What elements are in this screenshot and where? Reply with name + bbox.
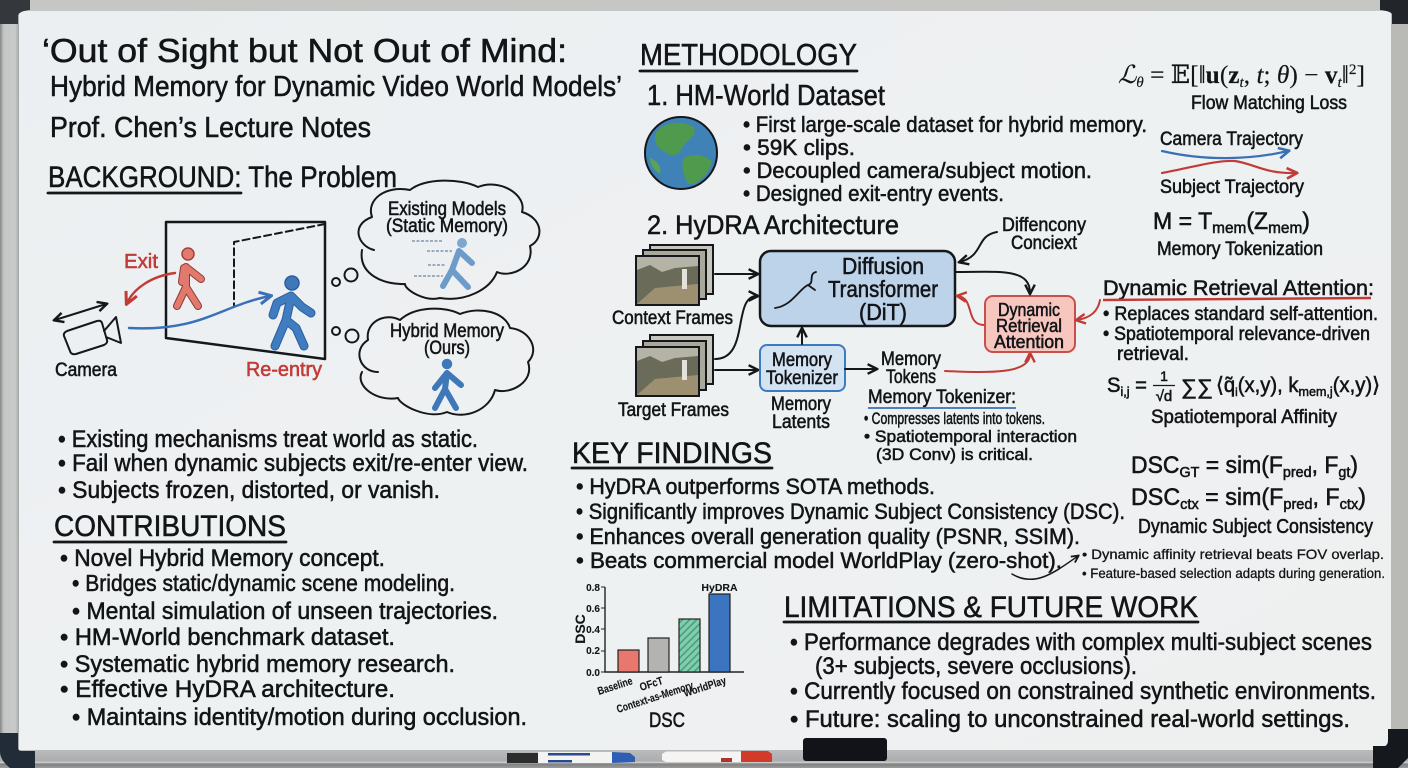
icon: consistent subject	[435, 360, 461, 408]
arrow: worldplay note	[1012, 556, 1078, 579]
arrow: re-entry path	[129, 296, 270, 328]
equation: spatiotemporal affinity: S	[1107, 374, 1121, 397]
chart axis: 0.6	[586, 604, 600, 615]
equation: dynamic subject consistency: )	[1358, 484, 1366, 511]
bar chart: DSC	[572, 582, 744, 732]
arrow: context to DiT	[960, 232, 997, 262]
heading: key findings: KEY FINDINGS	[572, 437, 772, 470]
limitations bullets: • Currently focused on constrained synthetic environments.	[790, 678, 1376, 705]
equation: spatiotemporal affinity: (x,y), k	[1238, 374, 1299, 397]
diagram: camera and subject trajectories: Camera Trajectory	[1160, 129, 1303, 150]
title: Prof. Chen’s Lecture Notes	[50, 112, 371, 144]
bar labels: Context-as-Memory	[615, 680, 696, 716]
box: dynamic retrieval attention: Attention	[994, 332, 1064, 352]
label: memory latents: Memory	[771, 394, 831, 415]
label: memory tokens: Memory	[881, 349, 941, 370]
background bullets: • Fail when dynamic subjects exit/re-enter view.	[58, 450, 528, 477]
equation: spatiotemporal affinity: (x,y)⟩	[1333, 374, 1380, 397]
equation: spatiotemporal affinity: =	[1130, 374, 1147, 397]
background bullets	[58, 426, 528, 504]
note: memory tokenizer: • Compresses latents into tokens.	[864, 409, 1045, 428]
contributions list: • Systematic hybrid memory research.	[60, 651, 455, 678]
contributions list	[60, 545, 527, 731]
background bullets: • Subjects frozen, distorted, or vanish.	[58, 477, 440, 504]
equation: memory tokenization: M = T	[1153, 208, 1215, 235]
tray: eraser	[803, 738, 887, 761]
note: memory tokenizer: • Spatiotemporal interaction	[864, 427, 1077, 446]
panel: methodology	[612, 37, 1147, 464]
equation: dynamic subject consistency: ctx	[1180, 496, 1199, 513]
arrow: attention to DiT	[958, 296, 984, 325]
subheading: dataset: 1. HM-World Dataset	[647, 80, 885, 112]
thought cloud: hybrid memory	[359, 309, 533, 415]
findings bullets: • Significantly improves Dynamic Subject Consistency (DSC).	[576, 499, 1125, 524]
equation: flow matching loss: 2	[1349, 62, 1357, 78]
equation: dynamic subject consistency: DSC	[1131, 484, 1182, 511]
chart axis	[572, 583, 744, 679]
arrow: note to attention	[1077, 300, 1100, 320]
equation: spatiotemporal affinity: √d	[1156, 388, 1172, 405]
limitations bullets: • Performance degrades with complex multi-subject scenes	[790, 629, 1372, 656]
arrow: DiT to attention	[956, 272, 1030, 293]
box: dynamic retrieval attention: Retrieval	[996, 316, 1062, 336]
note: retrieval comparison: • Dynamic affinity retrieval beats FOV overlap.	[1082, 546, 1384, 562]
icon: distorted subject	[412, 238, 472, 287]
heading: methodology: METHODOLOGY	[640, 37, 857, 72]
findings bullets: • HyDRA outperforms SOTA methods.	[576, 474, 935, 499]
thought cloud: existing models: Existing Models	[388, 199, 506, 220]
note: memory tokenizer: (3D Conv) is critical.	[876, 445, 1033, 464]
findings bullets	[576, 474, 1125, 573]
equation: memory tokenization: )	[1302, 208, 1310, 235]
equation: dynamic subject consistency: , F	[1312, 452, 1338, 479]
thought cloud: existing models: (Static Memory)	[386, 216, 508, 237]
label: memory tokens	[881, 349, 941, 388]
tray: blue marker	[507, 752, 635, 763]
thought cloud: existing models	[359, 181, 539, 299]
equation: flow matching loss: θ	[1136, 75, 1144, 91]
architecture diagram	[612, 215, 1100, 433]
equation: flow matching loss: t; θ) − v	[1256, 62, 1337, 89]
equation: dynamic subject consistency: Dynamic Subject Consistency	[1138, 516, 1373, 538]
tray: red marker	[662, 751, 772, 762]
equation: dynamic subject consistency: = sim(F	[1199, 484, 1283, 511]
diagram: camera and subject trajectories: Subject Trajectory	[1160, 177, 1304, 198]
bar labels	[596, 582, 738, 716]
label: memory tokens: Tokens	[886, 367, 936, 388]
arrow: tokens to retrieval attention	[945, 354, 1030, 372]
equation: dynamic subject consistency: pred	[1283, 464, 1312, 481]
icon: red person exiting	[177, 248, 201, 306]
chart axis: 0.8	[586, 583, 600, 594]
arrow: exit	[127, 273, 175, 303]
label: memory latents: Latents	[772, 412, 830, 433]
note: dynamic retrieval attention: Dynamic Retrieval Attention:	[1103, 277, 1374, 300]
label: differency context: Diffencony	[1002, 215, 1086, 236]
title: ‘Out of Sight but Not Out of Mind:	[42, 32, 567, 69]
equation: dynamic subject consistency: DSC	[1131, 452, 1182, 479]
equation: flow matching loss: ℒ	[1118, 62, 1137, 89]
box: diffusion transformer: (DiT)	[859, 299, 907, 325]
contributions list: • Mental simulation of unseen trajectories.	[72, 598, 498, 625]
equation: dynamic subject consistency: gt	[1338, 464, 1351, 481]
note: memory tokenizer	[864, 387, 1077, 464]
equation: dynamic subject consistency: , F	[1313, 484, 1340, 511]
note: dynamic retrieval attention: retrieval.	[1117, 344, 1189, 365]
box: memory tokenizer: Tokenizer	[766, 368, 839, 389]
equation: flow matching loss: ,	[1244, 62, 1256, 89]
target frames stack	[618, 335, 729, 421]
box: memory tokenizer: Memory	[772, 350, 832, 371]
equation: spatiotemporal affinity: 1	[1160, 368, 1168, 384]
heading: background: BACKGROUND: The Problem	[48, 161, 397, 194]
findings bullets: • Beats commercial model WorldPlay (zero-shot).	[576, 548, 1062, 573]
box: diffusion transformer: Diffusion	[842, 253, 924, 279]
contributions list: • Novel Hybrid Memory concept.	[60, 545, 385, 572]
note: retrieval comparison: • Feature-based selection adapts during generation.	[1082, 565, 1385, 581]
label: re-entry: Re-entry	[246, 359, 322, 381]
contributions list: • Bridges static/dynamic scene modeling.	[72, 570, 455, 596]
equation: memory tokenization	[1153, 208, 1323, 260]
contributions list: • Maintains identity/motion during occlusion.	[72, 704, 527, 731]
equation: dynamic subject consistency: pred	[1283, 496, 1313, 513]
equation: flow matching loss: ]	[1357, 62, 1365, 89]
equation: spatiotemporal affinity: i,j	[1121, 384, 1130, 399]
label: differency context: Conciext	[1011, 233, 1078, 254]
arrows: frames to models	[715, 274, 757, 370]
bar labels: WorldPlay	[682, 675, 728, 700]
dataset bullets	[743, 112, 1147, 206]
equation: flow matching loss: t	[1240, 75, 1245, 91]
heading: contributions: CONTRIBUTIONS	[54, 510, 286, 543]
label: exit: Exit	[124, 251, 158, 273]
chart axis: DSC	[572, 614, 588, 644]
bar labels: OFcT	[638, 675, 665, 694]
note: dynamic retrieval attention: • Spatiotemporal relevance-driven	[1103, 324, 1370, 345]
equation: spatiotemporal affinity: ∑∑	[1181, 376, 1213, 399]
note: dynamic retrieval attention: • Replaces standard self-attention.	[1103, 304, 1378, 325]
diagram: camera and subject trajectories	[1160, 129, 1304, 198]
arrow: tokenizer to tokens	[845, 368, 876, 370]
target frames stack: Target Frames	[618, 400, 729, 421]
box: dynamic retrieval attention	[985, 296, 1075, 352]
equation: flow matching loss	[1118, 62, 1365, 114]
bar labels: Baseline	[596, 675, 634, 698]
thought bubbles: hybrid memory	[332, 327, 358, 342]
label: camera: Camera	[55, 360, 117, 381]
contributions list: • Effective HyDRA architecture.	[60, 676, 395, 703]
dataset bullets: • First large-scale dataset for hybrid memory.	[743, 112, 1147, 137]
chart axis: 0.4	[586, 625, 600, 636]
note: dynamic retrieval attention	[1103, 277, 1378, 365]
equation: flow matching loss: u(z	[1206, 62, 1239, 89]
limitations bullets: (3+ subjects, severe occlusions).	[815, 653, 1137, 680]
bars	[618, 594, 730, 672]
equation: flow matching loss: ‖	[1342, 62, 1349, 89]
panel: contributions	[54, 510, 527, 731]
equation: spatiotemporal affinity: ⟨q̃	[1216, 374, 1236, 397]
dataset bullets: • Decoupled camera/subject motion.	[743, 158, 1092, 183]
equation: memory tokenization: mem	[1212, 220, 1246, 237]
chart axis: 0.2	[586, 646, 600, 657]
box: memory tokenizer	[760, 345, 845, 391]
equation: memory tokenization: mem	[1268, 220, 1302, 237]
title: Hybrid Memory for Dynamic Video World Models’	[50, 71, 622, 103]
equation: flow matching loss: Flow Matching Loss	[1191, 93, 1347, 114]
equation: spatiotemporal affinity: Spatiotemporal Affinity	[1151, 407, 1337, 428]
equation: memory tokenization: (Z	[1246, 208, 1268, 235]
heading: limitations: LIMITATIONS & FUTURE WORK	[784, 591, 1198, 624]
box: diffusion transformer: Transformer	[828, 276, 938, 302]
context frames stack: Context Frames	[612, 308, 733, 329]
chart axis: 0.0	[586, 668, 600, 679]
thought bubbles: existing models	[332, 268, 358, 286]
contributions list: • HM-World benchmark dataset.	[60, 624, 395, 651]
icon: blue person re-entering	[273, 276, 311, 346]
panel: limitations and future work	[784, 591, 1376, 733]
equation: spatiotemporal affinity	[1107, 368, 1380, 428]
dataset bullets: • Designed exit-entry events.	[743, 181, 1004, 206]
arrow: tokenizer to DiT	[801, 329, 803, 344]
equation: dynamic subject consistency: GT	[1179, 464, 1199, 481]
note: retrieval comparison	[1082, 546, 1385, 581]
label: differency context	[1002, 215, 1086, 254]
diagram: camera view frame	[166, 222, 325, 359]
panel: key findings	[572, 437, 1385, 732]
equation: flow matching loss: = 𝔼[‖	[1144, 62, 1206, 89]
chart title: DSC	[649, 709, 685, 732]
box: dynamic retrieval attention: Dynamic	[998, 300, 1060, 320]
equation: dynamic subject consistency	[1131, 452, 1373, 538]
equation: dynamic subject consistency: = sim(F	[1199, 452, 1283, 479]
dataset bullets: • 59K clips.	[743, 135, 855, 160]
limitations bullets	[790, 629, 1376, 733]
panel: background	[48, 161, 539, 504]
bar labels: HyDRA	[701, 582, 738, 594]
icon: camera	[55, 304, 121, 354]
background bullets: • Existing mechanisms treat world as static.	[58, 426, 478, 453]
subheading: architecture: 2. HyDRA Architecture	[647, 210, 899, 240]
equation: flow matching loss: t	[1338, 75, 1343, 91]
icon: globe	[645, 117, 717, 189]
equation: dynamic subject consistency: ctx	[1340, 496, 1359, 513]
findings bullets: • Enhances overall generation quality (PSNR, SSIM).	[576, 524, 1080, 549]
thought cloud: hybrid memory: (Ours)	[424, 338, 470, 359]
equation: spatiotemporal affinity: i	[1235, 385, 1238, 399]
equation: spatiotemporal affinity: mem,j	[1299, 384, 1333, 399]
thought cloud: hybrid memory: Hybrid Memory	[390, 321, 504, 342]
box: diffusion transformer	[760, 251, 955, 326]
context frames stack	[612, 245, 733, 329]
title	[42, 32, 622, 144]
equation: dynamic subject consistency: )	[1350, 452, 1358, 479]
label: memory latents	[771, 394, 831, 433]
note: memory tokenizer: Memory Tokenizer:	[868, 387, 1016, 408]
equation: memory tokenization: Memory Tokenization	[1157, 239, 1323, 260]
limitations bullets: • Future: scaling to unconstrained real-world settings.	[790, 706, 1350, 733]
